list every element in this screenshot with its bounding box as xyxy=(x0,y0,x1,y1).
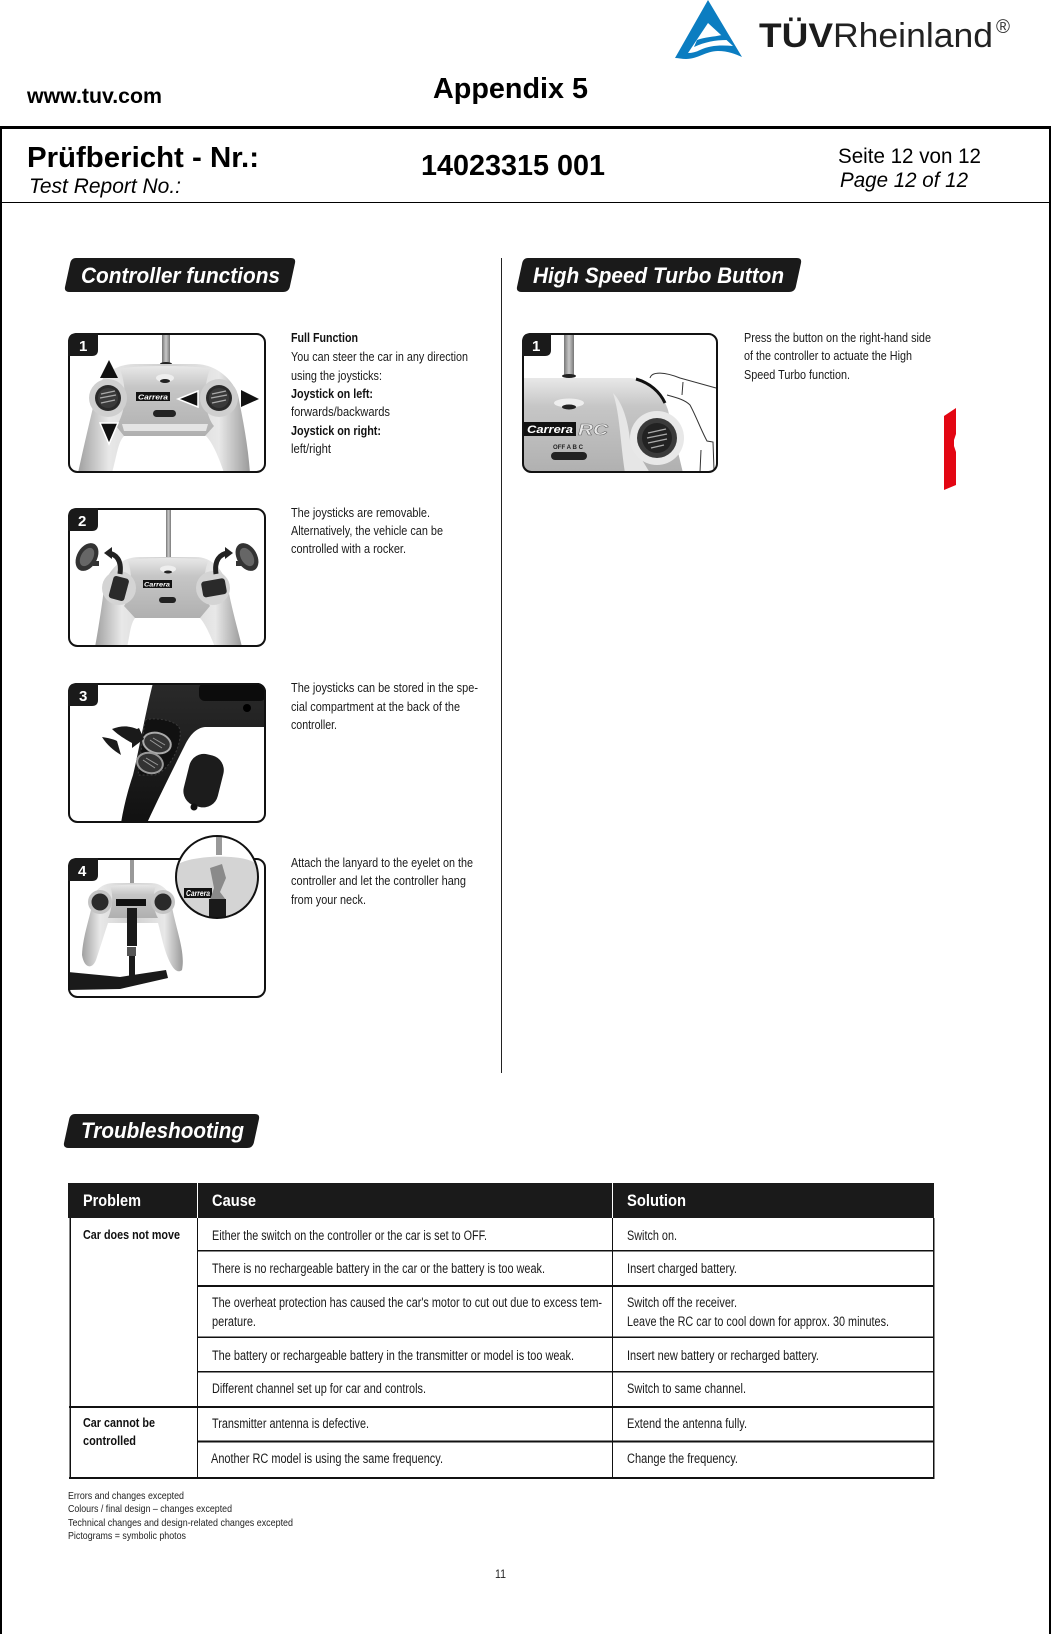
text: turbo: Press the button on the right-hand side xyxy=(744,330,931,345)
logo: TÜV Rheinland xyxy=(675,0,1010,59)
website: www.tuv.com xyxy=(26,85,162,108)
red side tab xyxy=(944,408,956,490)
solution column: Insert new battery or recharged battery. xyxy=(627,1348,819,1363)
number badge: 1 xyxy=(532,338,540,355)
cause column xyxy=(211,1228,602,1466)
heading: High Speed Turbo Button xyxy=(517,258,801,292)
number badge xyxy=(68,333,98,356)
text: storage: cial compartment at the back of the xyxy=(291,699,460,714)
arrow xyxy=(112,726,144,748)
text: turbo: of the controller to actuate the High xyxy=(744,348,912,363)
text: removable: Alternatively, the vehicle can be xyxy=(291,523,443,538)
arrows xyxy=(100,360,259,444)
text: full function: using the joysticks: xyxy=(291,368,382,383)
cause column: Different channel set up for car and controls. xyxy=(212,1381,426,1396)
cause column: Another RC model is using the same frequency. xyxy=(211,1451,443,1466)
report label xyxy=(27,142,259,198)
problem column: controlled xyxy=(83,1433,136,1448)
solution column xyxy=(627,1228,889,1466)
panel 3: storage compartment xyxy=(68,683,266,823)
number badge: 3 xyxy=(79,688,87,705)
report label: Prüfbericht - Nr.: xyxy=(27,142,259,174)
page number: Seite 12 von 12 xyxy=(838,145,981,168)
text: lanyard xyxy=(291,855,473,907)
solution column: Switch off the receiver. xyxy=(627,1295,737,1310)
footnotes: Pictograms = symbolic photos xyxy=(68,1530,186,1542)
number badge: 4 xyxy=(78,863,87,880)
number badge: 2 xyxy=(78,513,86,530)
detail inset: Carrera xyxy=(186,889,210,898)
text: full function xyxy=(291,330,468,456)
cause column: There is no rechargeable battery in the car or the battery is too weak. xyxy=(212,1261,545,1276)
cause column: perature. xyxy=(212,1314,256,1329)
problem column: Car cannot be xyxy=(83,1415,155,1430)
solution column: Change the frequency. xyxy=(627,1451,738,1466)
text: full function: left/right xyxy=(291,441,331,456)
logo: TÜV Rheinland: Rheinland xyxy=(833,17,993,55)
logo: TÜV Rheinland: ® xyxy=(996,17,1010,38)
panel 2: removable joysticks: Carrera xyxy=(144,582,171,588)
column divider xyxy=(501,258,502,1073)
text: turbo: Speed Turbo function. xyxy=(744,367,850,382)
table header: Problem xyxy=(83,1192,141,1210)
table header: Cause xyxy=(212,1192,256,1210)
solution column: Switch to same channel. xyxy=(627,1381,746,1396)
footnotes: Technical changes and design-related changes excepted xyxy=(68,1517,293,1529)
text: full function: forwards/backwards xyxy=(291,404,390,419)
panel 4: lanyard xyxy=(68,836,265,997)
text: full function: You can steer the car in any direction xyxy=(291,349,468,364)
panel: turbo button xyxy=(522,333,718,473)
number badge xyxy=(522,333,551,356)
cause column: Transmitter antenna is defective. xyxy=(212,1416,369,1431)
text: full function: Full Function xyxy=(291,330,358,345)
text: storage: controller. xyxy=(291,717,337,732)
text: full function: Joystick on left: xyxy=(291,386,373,401)
problem column: Car does not move xyxy=(83,1227,180,1242)
heading: Controller functions: Controller functions xyxy=(81,263,280,288)
text: lanyard: from your neck. xyxy=(291,892,366,907)
number badge xyxy=(68,508,98,531)
table grid xyxy=(69,1218,934,1479)
title: Appendix 5: Appendix 5 xyxy=(433,73,588,105)
problem column xyxy=(83,1227,180,1448)
number badge xyxy=(68,858,98,881)
text: removable: controlled with a rocker. xyxy=(291,541,406,556)
text: lanyard: Attach the lanyard to the eyelet on the xyxy=(291,855,473,870)
footnotes xyxy=(68,1490,293,1542)
report number: 14023315 001 xyxy=(421,150,605,182)
solution column: Switch on. xyxy=(627,1228,677,1243)
heading: Troubleshooting: Troubleshooting xyxy=(81,1118,245,1143)
panel 1: controller with arrows: Carrera xyxy=(138,394,168,402)
page number: Page 12 of 12 xyxy=(840,169,968,192)
text: turbo xyxy=(744,330,931,382)
table header: Solution xyxy=(627,1192,686,1210)
panel: turbo button: OFF A B C xyxy=(553,445,584,451)
panel: turbo button: Carrera xyxy=(527,424,573,436)
heading: Troubleshooting xyxy=(64,1114,259,1148)
icon: blue triangle xyxy=(675,0,742,59)
text: full function: Joystick on right: xyxy=(291,423,381,438)
arrows xyxy=(108,553,120,574)
number badge xyxy=(68,683,98,706)
solution column: Leave the RC car to cool down for approx. 30 minutes. xyxy=(627,1314,889,1329)
panel: turbo button: RC xyxy=(578,422,609,439)
page number xyxy=(838,145,981,192)
number badge: 1 xyxy=(79,338,87,355)
text: removable: The joysticks are removable. xyxy=(291,505,430,520)
footnotes: Errors and changes excepted xyxy=(68,1490,184,1502)
table header xyxy=(68,1183,934,1218)
footnotes: Colours / final design – changes excepted xyxy=(68,1503,232,1515)
solution column: Extend the antenna fully. xyxy=(627,1416,747,1431)
page folio: 11 xyxy=(495,1567,506,1581)
text: lanyard: controller and let the controller hang xyxy=(291,873,466,888)
logo wordmark: TÜV xyxy=(759,17,833,55)
cap xyxy=(183,754,224,808)
panel 1: controller with arrows xyxy=(68,333,265,473)
heading: High Speed Turbo Button: High Speed Turbo Button xyxy=(533,263,784,288)
heading: Controller functions xyxy=(65,258,295,292)
text: removable xyxy=(291,505,443,556)
text: storage: The joysticks can be stored in the spe- xyxy=(291,680,478,695)
cause column: The overheat protection has caused the car's motor to cut out due to excess tem- xyxy=(212,1295,602,1310)
cause column: The battery or rechargeable battery in the transmitter or model is too weak. xyxy=(212,1348,574,1363)
cause column: Either the switch on the controller or the car is set to OFF. xyxy=(212,1228,487,1243)
solution column: Insert charged battery. xyxy=(627,1261,737,1276)
panel 2: removable joysticks xyxy=(68,508,265,647)
troubleshooting table xyxy=(68,1183,934,1479)
report label: Test Report No.: xyxy=(29,175,181,198)
text: storage xyxy=(291,680,478,732)
detail inset xyxy=(176,836,258,920)
